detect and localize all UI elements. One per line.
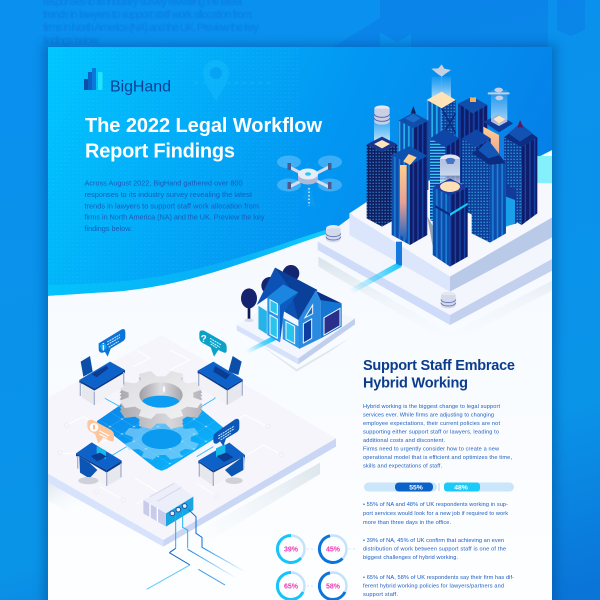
rear roof bbox=[316, 291, 342, 304]
hero banner bbox=[48, 47, 552, 296]
desk top-left bbox=[79, 356, 125, 405]
drone bbox=[277, 156, 342, 208]
back tower two bbox=[458, 97, 487, 183]
network wires bbox=[147, 509, 245, 589]
body copy: Firms need to urgently consider how to create a new bbox=[363, 447, 500, 453]
centre bay bbox=[267, 284, 298, 342]
bullet three bbox=[363, 575, 514, 598]
gear bbox=[120, 371, 202, 429]
section heading bbox=[363, 358, 515, 392]
intro text: findings below. bbox=[84, 224, 132, 233]
central pad bbox=[98, 378, 225, 469]
lower platform tier bbox=[318, 216, 552, 325]
bullet one: • 55% of NA and 48% of UK respondents working in sup- bbox=[363, 502, 508, 508]
wires to desks bbox=[105, 375, 215, 457]
dark left tower bbox=[367, 105, 397, 227]
title: Report Findings bbox=[85, 141, 235, 163]
house platform bbox=[236, 318, 355, 364]
body copy: services ever. While firms are adjusting to changing bbox=[363, 413, 494, 419]
gable wall bbox=[298, 290, 321, 349]
middle tower bbox=[430, 129, 459, 227]
donut 45%: 45% bbox=[326, 546, 341, 554]
office platform shadow bbox=[47, 463, 320, 548]
bullet three: support staff. bbox=[363, 592, 398, 598]
bullet one: more than three days in the office. bbox=[363, 520, 451, 526]
house path bbox=[247, 337, 276, 353]
desk bottom-right bbox=[198, 443, 245, 486]
side window wall bbox=[283, 318, 299, 348]
cyan back panel bbox=[537, 156, 552, 184]
middle-right tower bbox=[462, 129, 491, 217]
upper platform tier bbox=[349, 180, 553, 292]
bubble info: i bbox=[102, 342, 105, 353]
data path bbox=[351, 242, 402, 293]
back tower one bbox=[398, 106, 428, 190]
bullet one: port services would look for a new job if required to work bbox=[363, 511, 508, 517]
ghost background text: findings below. bbox=[43, 35, 100, 47]
server box bbox=[143, 483, 193, 527]
title bbox=[85, 115, 322, 163]
donut 39%: 39% bbox=[284, 546, 299, 554]
donut 65% bbox=[277, 572, 313, 600]
front-centre tower bbox=[433, 154, 468, 267]
title: The 2022 Legal Workflow bbox=[85, 115, 322, 137]
donut 39% bbox=[277, 535, 313, 562]
donut 65%: 65% bbox=[284, 584, 299, 590]
main roof bbox=[257, 268, 317, 320]
house platform shadow bbox=[262, 340, 348, 372]
intro text: firms in North America (NA) and the UK. Preview the key bbox=[84, 213, 265, 222]
left wing wall bbox=[258, 305, 267, 335]
donut 58%: 58% bbox=[326, 584, 341, 590]
bullet two: biggest challenges of hybrid working. bbox=[363, 555, 458, 561]
body copy: supporting either support staff or lawyers, leading to bbox=[363, 430, 499, 436]
house illustration bbox=[237, 265, 355, 372]
office platform bbox=[47, 335, 336, 547]
bullet two: distribution of work between support staff is one of the bbox=[363, 546, 506, 552]
ghost background text: trends in lawyers to support staff work allocation from bbox=[43, 9, 252, 21]
body copy: employee expectations, their current policies are not bbox=[363, 421, 500, 427]
data cylinder left bbox=[326, 225, 341, 242]
card bbox=[47, 47, 553, 600]
back trees bbox=[261, 265, 299, 294]
section heading: Support Staff Embrace bbox=[363, 358, 515, 374]
bullet three: ferent hybrid working policies for lawyers/partners and bbox=[363, 584, 504, 590]
body copy: operational model that is efficient and optimizes the time, bbox=[363, 455, 512, 461]
office illustration bbox=[47, 329, 336, 589]
logo bbox=[84, 68, 171, 96]
body copy bbox=[363, 404, 512, 470]
donut 45% bbox=[319, 536, 355, 562]
bubble question bbox=[199, 330, 227, 357]
intro text: trends in lawyers to support staff work allocation from bbox=[84, 201, 259, 210]
bullet one bbox=[363, 502, 508, 526]
comparison bar bbox=[364, 482, 514, 492]
small drone bbox=[488, 88, 510, 100]
front tree bbox=[241, 288, 257, 322]
intro text: Across August 2022, BigHand gathered over 800 bbox=[84, 178, 242, 188]
ghost background text: firms in North America (NA) and the UK. Preview the key bbox=[43, 22, 260, 34]
glass tower bbox=[427, 92, 456, 187]
donut 58% bbox=[319, 572, 346, 600]
ghost background text bbox=[43, 0, 260, 47]
city illustration bbox=[318, 64, 553, 343]
body copy: additional costs and discontent. bbox=[363, 438, 445, 444]
body copy: Hybrid working is the biggest change to legal support bbox=[363, 404, 500, 410]
card shadow bbox=[43, 44, 557, 600]
circuit lines bbox=[60, 350, 280, 503]
bullet two bbox=[363, 538, 506, 561]
logo: BigHand bbox=[110, 78, 171, 96]
section heading: Hybrid Working bbox=[363, 376, 468, 392]
circuit nodes bbox=[58, 423, 284, 502]
ghost background towers bbox=[333, 0, 585, 47]
data cylinder front bbox=[441, 292, 456, 308]
comparison bar: 48% bbox=[454, 485, 468, 492]
tall far-right tower bbox=[504, 120, 537, 227]
orange tower bbox=[483, 90, 514, 165]
front-left tower bbox=[392, 146, 427, 245]
location pin watermark bbox=[194, 60, 272, 101]
bubble warning bbox=[87, 420, 114, 443]
intro text bbox=[84, 178, 265, 233]
platform shadow bbox=[318, 257, 552, 300]
star drone bbox=[431, 64, 451, 100]
intro text: responses to its industry survey revealing the latest bbox=[84, 190, 252, 199]
front-right tower bbox=[472, 140, 506, 243]
tower shadow bbox=[428, 217, 433, 246]
bullet two: • 39% of NA, 45% of UK confirm that achieving an even bbox=[363, 538, 504, 544]
bubble info bbox=[99, 329, 125, 357]
body copy: skills and expectations of staff. bbox=[363, 464, 442, 470]
comparison bar: 55% bbox=[409, 485, 423, 492]
desk bottom-left bbox=[76, 442, 122, 486]
gear shadow on pad bbox=[124, 418, 199, 460]
bubble note bbox=[213, 419, 239, 446]
bubble question: ? bbox=[201, 334, 207, 345]
bullet three: • 65% of NA, 58% of UK respondents say their firm has dif- bbox=[363, 575, 514, 581]
garage wall bbox=[321, 300, 342, 338]
desk top-right bbox=[198, 356, 243, 405]
